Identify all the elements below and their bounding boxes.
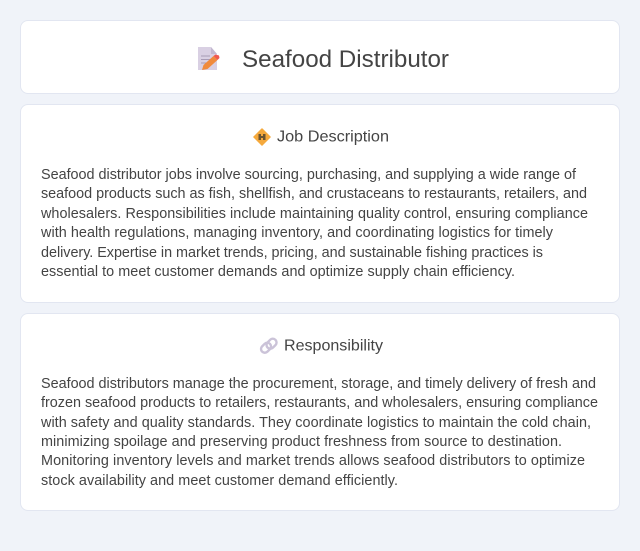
panel: responsibility	[20, 314, 620, 510]
job description paragraph: essential to meet customer demands and optimize supply chain efficiency.	[41, 264, 515, 280]
panel: title	[20, 20, 620, 94]
responsibility paragraph: Seafood distributors manage the procurement, storage, and timely delivery of fresh and	[41, 376, 596, 392]
job description paragraph	[40, 167, 588, 280]
title text: Seafood Distributor	[242, 46, 449, 73]
icon: orange diamond sign	[254, 129, 270, 145]
job description paragraph: with health regulations, managing inventory, and coordinating logistics for timely	[40, 225, 554, 241]
job description paragraph: wholesalers. Responsibilities include maintaining quality control, ensuring compliance	[40, 206, 588, 222]
responsibility paragraph	[40, 376, 598, 489]
heading: job description: Job Description	[277, 128, 389, 146]
responsibility paragraph: Monitoring inventory levels and market trends allows seafood distributors to optimize	[41, 453, 585, 469]
responsibility paragraph: frozen seafood products to retailers, restaurants, and wholesalers, ensuring compliance	[41, 395, 598, 411]
icon: chain link	[259, 337, 278, 354]
responsibility paragraph: stock availability and meet customer demand efficiently.	[41, 473, 398, 489]
job description paragraph: delivery. Expertise in market trends, pricing, and sustainable fishing practices is	[41, 245, 543, 261]
icon: document with pencil	[198, 47, 220, 70]
responsibility paragraph: with safety and quality standards. They coordinate logistics to maintain the cold chain,	[40, 415, 591, 431]
heading: responsibility: Responsibility	[284, 338, 383, 354]
job description paragraph: Seafood distributor jobs involve sourcing, purchasing, and supplying a wide range of	[41, 167, 577, 183]
panel: job description	[20, 104, 620, 302]
responsibility paragraph: minimizing spoilage and preserving product freshness from source to destination.	[41, 434, 562, 450]
job description paragraph: seafood products such as fish, shellfish, and crustaceans to restaurants, retailers, and	[41, 186, 587, 202]
